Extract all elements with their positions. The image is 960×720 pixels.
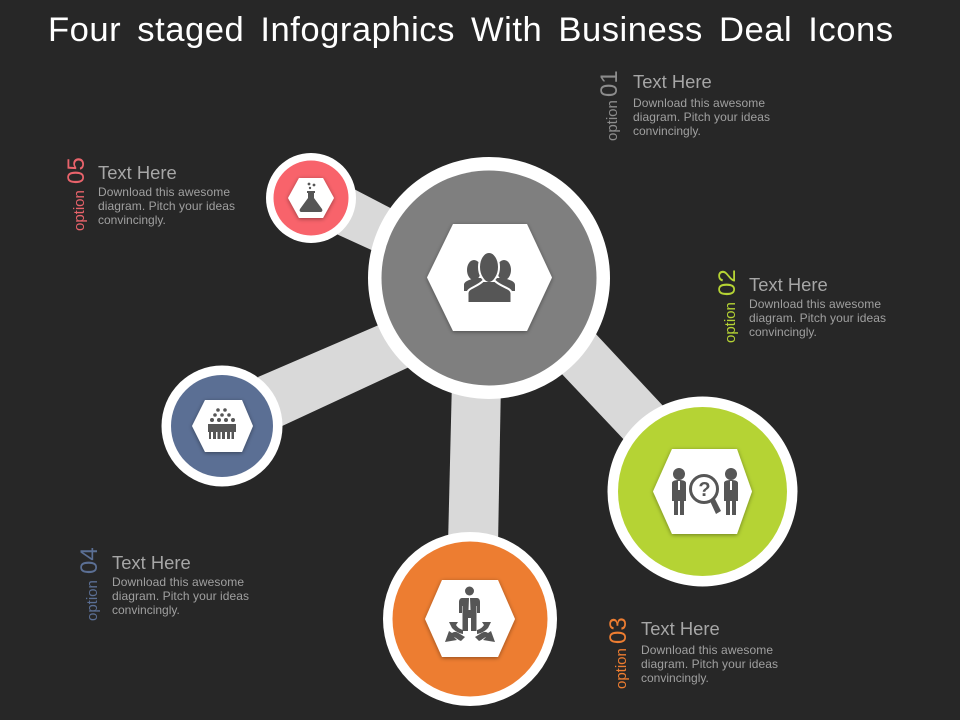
text block: option 03: Download this awesome — [641, 643, 773, 657]
text block: option 05 — [63, 157, 235, 231]
text block: option 03 — [605, 617, 778, 689]
text block: option 03: Text Here — [641, 618, 720, 639]
text block: option 02: Text Here — [749, 274, 828, 295]
node: option 02 — [608, 396, 798, 586]
text block: option 03: 03 — [605, 617, 632, 644]
text block: option 04: option — [84, 580, 101, 621]
icon: two people with question magnifier — [672, 468, 738, 515]
text block: option 02: diagram. Pitch your ideas — [749, 311, 886, 325]
text block: option 05: option — [71, 190, 88, 231]
text block: option 03: convincingly. — [641, 671, 709, 685]
text block: option 02: Download this awesome — [749, 297, 881, 311]
text block: option 05: Text Here — [98, 162, 177, 183]
text block: option 02: option — [722, 302, 739, 343]
text block: option 04: Download this awesome — [112, 575, 244, 589]
connector: main to option 05 — [332, 187, 400, 253]
text block: option 01: convincingly. — [633, 124, 701, 138]
text block: option 03: diagram. Pitch your ideas — [641, 657, 778, 671]
text block: option 03: option — [613, 648, 630, 689]
text block: option 05: diagram. Pitch your ideas — [98, 199, 235, 213]
text block: option 04: Text Here — [112, 552, 191, 573]
text block: option 04: convincingly. — [112, 603, 180, 617]
icon: crowd of people — [208, 408, 236, 439]
connector: main to option 04 — [258, 318, 420, 427]
icon: person at crossroads — [445, 586, 495, 642]
text block: option 05: convincingly. — [98, 213, 166, 227]
text block: option 01: diagram. Pitch your ideas — [633, 110, 770, 124]
text block: option 01: Text Here — [633, 71, 712, 92]
text block: option 01: Download this awesome — [633, 96, 765, 110]
node: option 05 — [266, 153, 356, 243]
text block: option 02 — [714, 269, 886, 343]
text block: option 04 — [76, 547, 249, 621]
title: Four staged Infographics With Business Deal Icons — [48, 11, 893, 49]
text block: option 05: 05 — [63, 157, 90, 184]
node: main people — [368, 157, 610, 399]
connector: main to option 03 — [448, 380, 501, 545]
text block: option 02: convincingly. — [749, 325, 817, 339]
icon: group of people — [464, 252, 515, 303]
text block: option 04: diagram. Pitch your ideas — [112, 589, 249, 603]
text block: option 01: 01 — [596, 70, 623, 97]
text block: option 04: 04 — [76, 547, 103, 574]
connector: main to option 02 — [560, 332, 665, 444]
icon: two people with question magnifier: ? — [698, 479, 711, 501]
text block: option 05: Download this awesome — [98, 185, 230, 199]
node: option 04 — [162, 366, 282, 486]
text block: option 01 — [596, 70, 770, 141]
icon: flask — [300, 183, 322, 212]
text block: option 01: option — [604, 100, 621, 141]
node: option 03 — [383, 532, 557, 706]
text block: option 02: 02 — [714, 269, 741, 296]
